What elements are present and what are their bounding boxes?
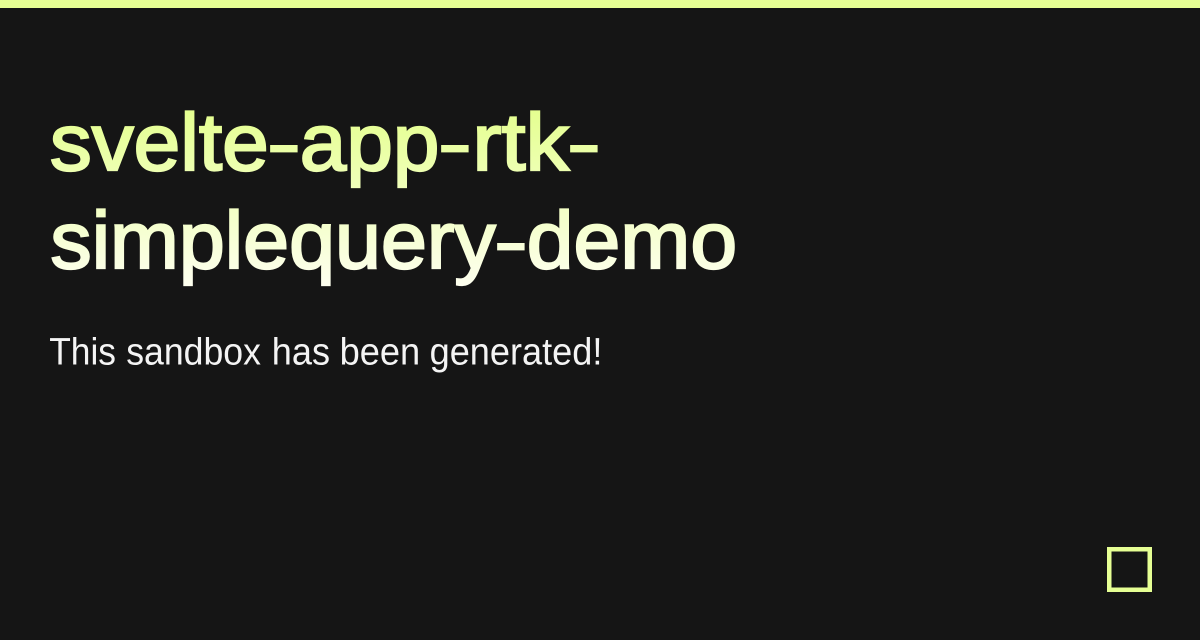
subtitle text: been <box>340 331 420 373</box>
title: rtk <box>472 98 570 188</box>
top accent bar <box>0 0 1200 8</box>
title: app <box>300 98 439 188</box>
subtitle text: sandbox <box>126 331 261 373</box>
title: simplequery <box>50 196 496 286</box>
subtitle text <box>49 331 602 373</box>
icon: square logo <box>1109 549 1150 590</box>
title: svelte <box>50 98 269 188</box>
title: - <box>493 193 529 287</box>
title <box>50 95 737 287</box>
title: - <box>437 95 473 189</box>
subtitle text: This <box>49 331 116 373</box>
subtitle text: generated! <box>430 331 602 373</box>
subtitle text: has <box>272 331 330 373</box>
title: - <box>566 95 602 189</box>
title: - <box>266 95 302 189</box>
title: demo <box>527 196 737 286</box>
